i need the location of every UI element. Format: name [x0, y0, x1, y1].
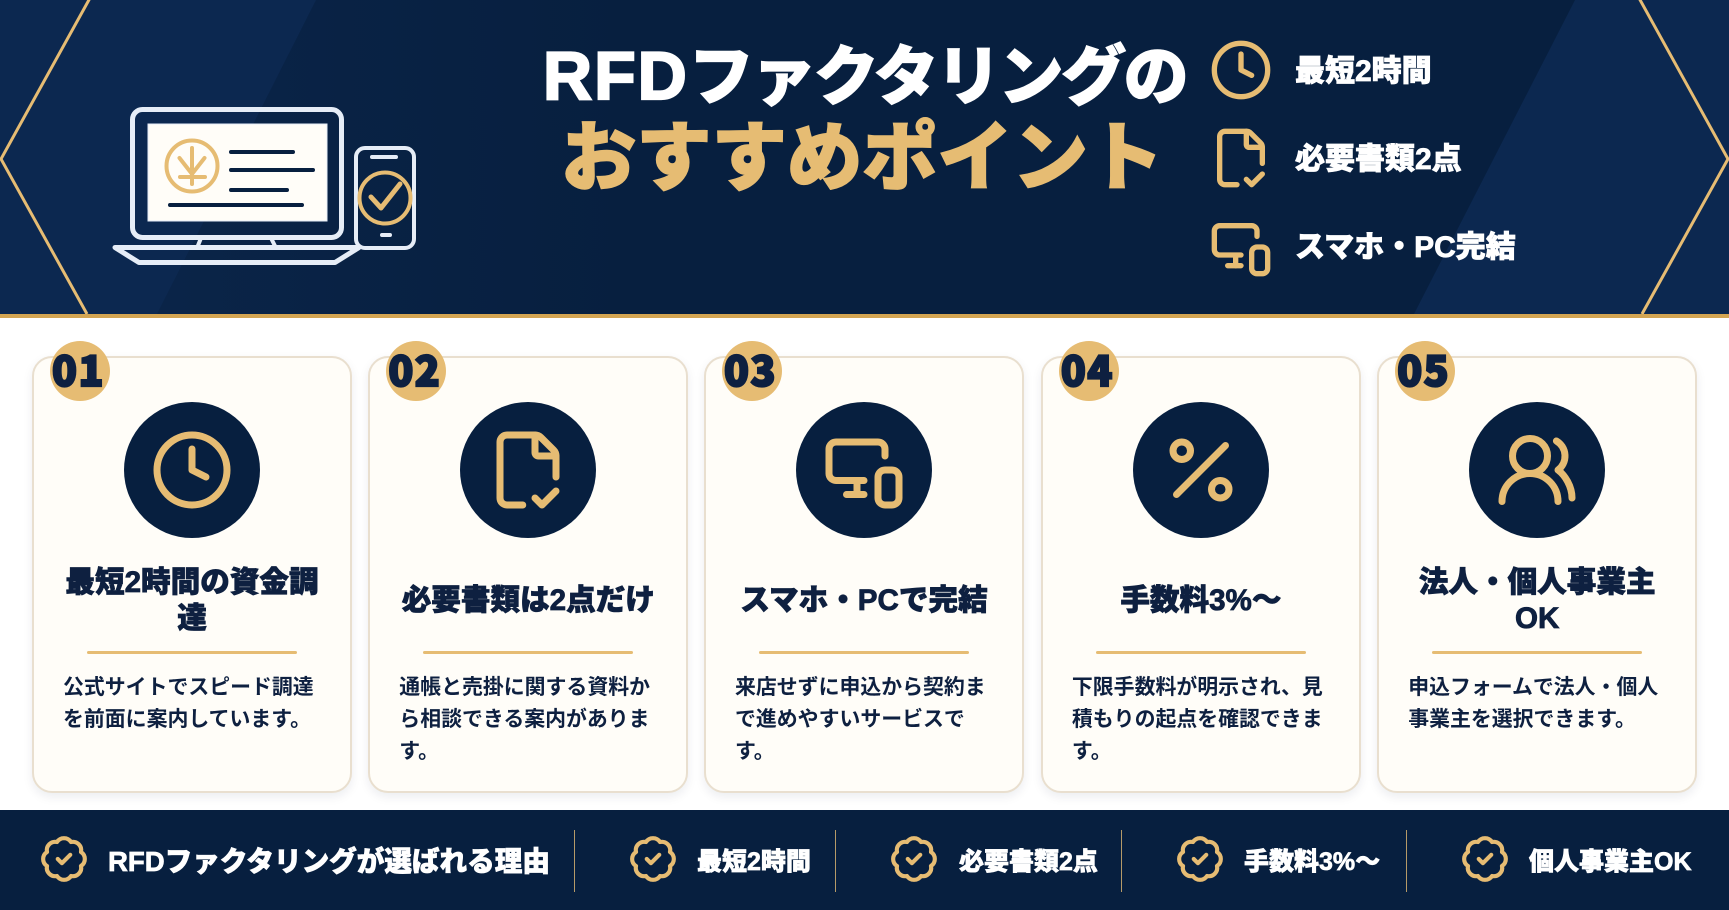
- title line 2: おすすめポイント: [561, 116, 1163, 200]
- icon: percent: [1133, 402, 1269, 538]
- card 01: [32, 356, 352, 793]
- icon: users: [1469, 402, 1605, 538]
- icon: badge check: [1177, 836, 1223, 882]
- card title: 達: [177, 602, 207, 635]
- number badge 04: 04: [1061, 338, 1114, 398]
- card title: 法人・個人事業主: [1419, 566, 1656, 599]
- title line 1: RFDファクタリングの: [543, 38, 1186, 114]
- card description: を前面に案内しています。: [63, 703, 311, 733]
- card description: [1408, 671, 1658, 733]
- card description: [399, 671, 650, 765]
- icon: badge check: [891, 836, 937, 882]
- card 04: [1041, 356, 1361, 793]
- icon: badge check: [41, 836, 87, 882]
- icon: monitor and smartphone: [796, 402, 932, 538]
- footer item: 必要書類2点: [891, 836, 1098, 882]
- card title: [65, 566, 319, 635]
- header banner: [0, 0, 1729, 318]
- number badge 02: 02: [388, 338, 441, 398]
- label: スマホ・PC完結: スマホ・PC完結: [1295, 231, 1516, 264]
- card title: [1419, 566, 1656, 635]
- footer item: reason heading: [41, 836, 550, 882]
- text: 最短2時間: [697, 848, 811, 876]
- card description: 事業主を選択できます。: [1408, 703, 1636, 733]
- number badge 05: 05: [1397, 338, 1450, 398]
- number badge 03: 03: [724, 338, 777, 398]
- card title: 最短2時間の資金調: [65, 566, 319, 599]
- text: 手数料3%〜: [1244, 848, 1380, 876]
- card title: 必要書類は2点だけ: [402, 584, 655, 617]
- footer item: 手数料3%〜: [1177, 836, 1380, 882]
- card description: 通帳と売掛に関する資料か: [399, 671, 650, 701]
- icon: clock: [124, 402, 260, 538]
- card description: す。: [1072, 735, 1112, 765]
- card 02: [368, 356, 688, 793]
- text: 個人事業主OK: [1529, 848, 1692, 876]
- icon: document check: [460, 402, 596, 538]
- footer item: 最短2時間: [630, 836, 811, 882]
- card description: す。: [399, 735, 439, 765]
- text: 必要書類2点: [959, 848, 1098, 876]
- text: RFDファクタリングが選ばれる理由: [108, 846, 550, 877]
- icon: monitor and smartphone: [1212, 223, 1270, 276]
- label: 必要書類2点: 必要書類2点: [1295, 143, 1462, 176]
- card description: す。: [735, 735, 775, 765]
- card 03: [704, 356, 1024, 793]
- header background with chevrons: [0, 0, 1729, 318]
- icon: document check: [1217, 128, 1265, 188]
- card description: 申込フォームで法人・個人: [1408, 671, 1658, 701]
- card description: 積もりの起点を確認できま: [1072, 703, 1323, 733]
- card description: で進めやすいサービスで: [735, 703, 965, 733]
- number badge 01: 01: [52, 338, 105, 398]
- icon: clock: [1212, 40, 1270, 100]
- card description: 下限手数料が明示され、見: [1072, 671, 1323, 701]
- card title: スマホ・PCで完結: [740, 584, 988, 617]
- card description: 公式サイトでスピード調達: [63, 671, 314, 701]
- icon: badge check: [630, 836, 676, 882]
- card description: [735, 671, 986, 765]
- card description: [1072, 671, 1323, 765]
- footer band: [0, 810, 1729, 910]
- card description: 来店せずに申込から契約ま: [735, 671, 986, 701]
- card title: OK: [1515, 602, 1559, 635]
- footer item: 個人事業主OK: [1462, 836, 1692, 882]
- label: 最短2時間: 最短2時間: [1295, 55, 1432, 88]
- card title: 手数料3%〜: [1120, 584, 1281, 617]
- illustration: laptop and smartphone: [112, 107, 416, 265]
- icon: badge check: [1462, 836, 1508, 882]
- card 05: [1377, 356, 1697, 793]
- card description: ら相談できる案内がありま: [399, 703, 650, 733]
- card description: [63, 671, 314, 733]
